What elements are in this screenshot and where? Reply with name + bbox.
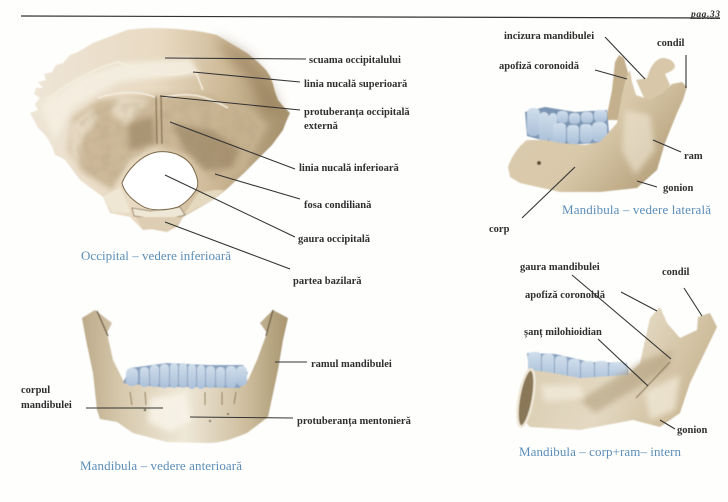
label: scuama occipitalului: scuama occipitalului — [309, 55, 401, 66]
label: fosa condiliană: fosa condiliană — [304, 200, 372, 211]
label: linia nucală inferioară — [170, 122, 400, 174]
label: apofiză coronoidă lateral — [499, 61, 627, 79]
illustration: mandible lateral — [508, 55, 687, 192]
label: condil lateral — [657, 38, 686, 88]
caption: internal view: Mandibula – corp+ram– intern — [519, 444, 682, 459]
foramen magnum — [122, 152, 198, 210]
header rule — [21, 16, 720, 18]
label: condil internal: condil — [662, 267, 690, 278]
panel: mandible anterior view — [21, 310, 412, 473]
panel: mandible internal view — [514, 262, 717, 459]
label: gonion internal — [660, 420, 708, 436]
label: fosa condiliană — [215, 174, 372, 211]
label: ramul mandibulei — [275, 359, 392, 370]
label: linia nucală superioară — [193, 72, 408, 90]
label: ramul mandibulei: ramul mandibulei — [311, 359, 392, 370]
label: gonion lateral: gonion — [663, 183, 694, 194]
label: partea bazilară — [165, 222, 362, 287]
label: linia nucală superioară: linia nucală superioară — [304, 79, 408, 90]
caption: lateral view: Mandibula – vedere laterală — [562, 202, 711, 217]
label: corpul mandibulei — [21, 385, 163, 411]
caption: anterior view: Mandibula – vedere anterioară — [80, 458, 242, 473]
illustration: mandible anterior — [82, 310, 288, 443]
caption: occipital: Occipital – vedere inferioară — [81, 248, 231, 263]
label: incizura mandibulei — [504, 31, 645, 79]
label: corp: corp — [489, 224, 510, 235]
label: șanț milohioidian — [524, 327, 648, 386]
label: protuberanța occipitală externă: protuberanța occipitală — [304, 107, 410, 118]
label: corp — [489, 167, 575, 235]
label: condil internal — [662, 267, 702, 316]
label: gonion internal: gonion — [677, 425, 708, 436]
label: gaura mandibulei: gaura mandibulei — [520, 262, 600, 273]
label: protuberanța occipitală externă: externă — [304, 121, 339, 132]
label: ram — [653, 140, 703, 162]
label: gaura occipitală — [165, 175, 371, 245]
label: protuberanța occipitală externă — [160, 96, 410, 132]
panel: occipital bone — [30, 28, 410, 287]
label: protuberanța mentonieră: protuberanța mentonieră — [297, 416, 412, 427]
label: apofiză coronoidă internal — [525, 290, 657, 311]
illustration: mandible internal — [514, 307, 717, 430]
page number: pag.33 — [690, 10, 720, 20]
label: corpul mandibulei: corpul — [21, 385, 50, 396]
label: condil lateral: condil — [657, 38, 685, 49]
label: corpul mandibulei: mandibulei — [21, 400, 72, 411]
label: gaura mandibulei — [520, 262, 671, 359]
label: gonion lateral — [637, 181, 694, 194]
illustration: occipital bone — [30, 28, 290, 232]
label: gaura occipitală: gaura occipitală — [298, 234, 371, 245]
label: partea bazilară: partea bazilară — [293, 276, 362, 287]
label: apofiză coronoidă lateral: apofiză coronoidă — [499, 61, 580, 72]
label: ram: ram — [684, 151, 703, 162]
label: incizura mandibulei: incizura mandibulei — [504, 31, 594, 42]
label: șanț milohioidian: șanț milohioidian — [524, 327, 602, 338]
panel: mandible lateral view — [489, 31, 711, 235]
label: apofiză coronoidă internal: apofiză coronoidă — [525, 290, 606, 301]
label: linia nucală inferioară: linia nucală inferioară — [299, 163, 400, 174]
